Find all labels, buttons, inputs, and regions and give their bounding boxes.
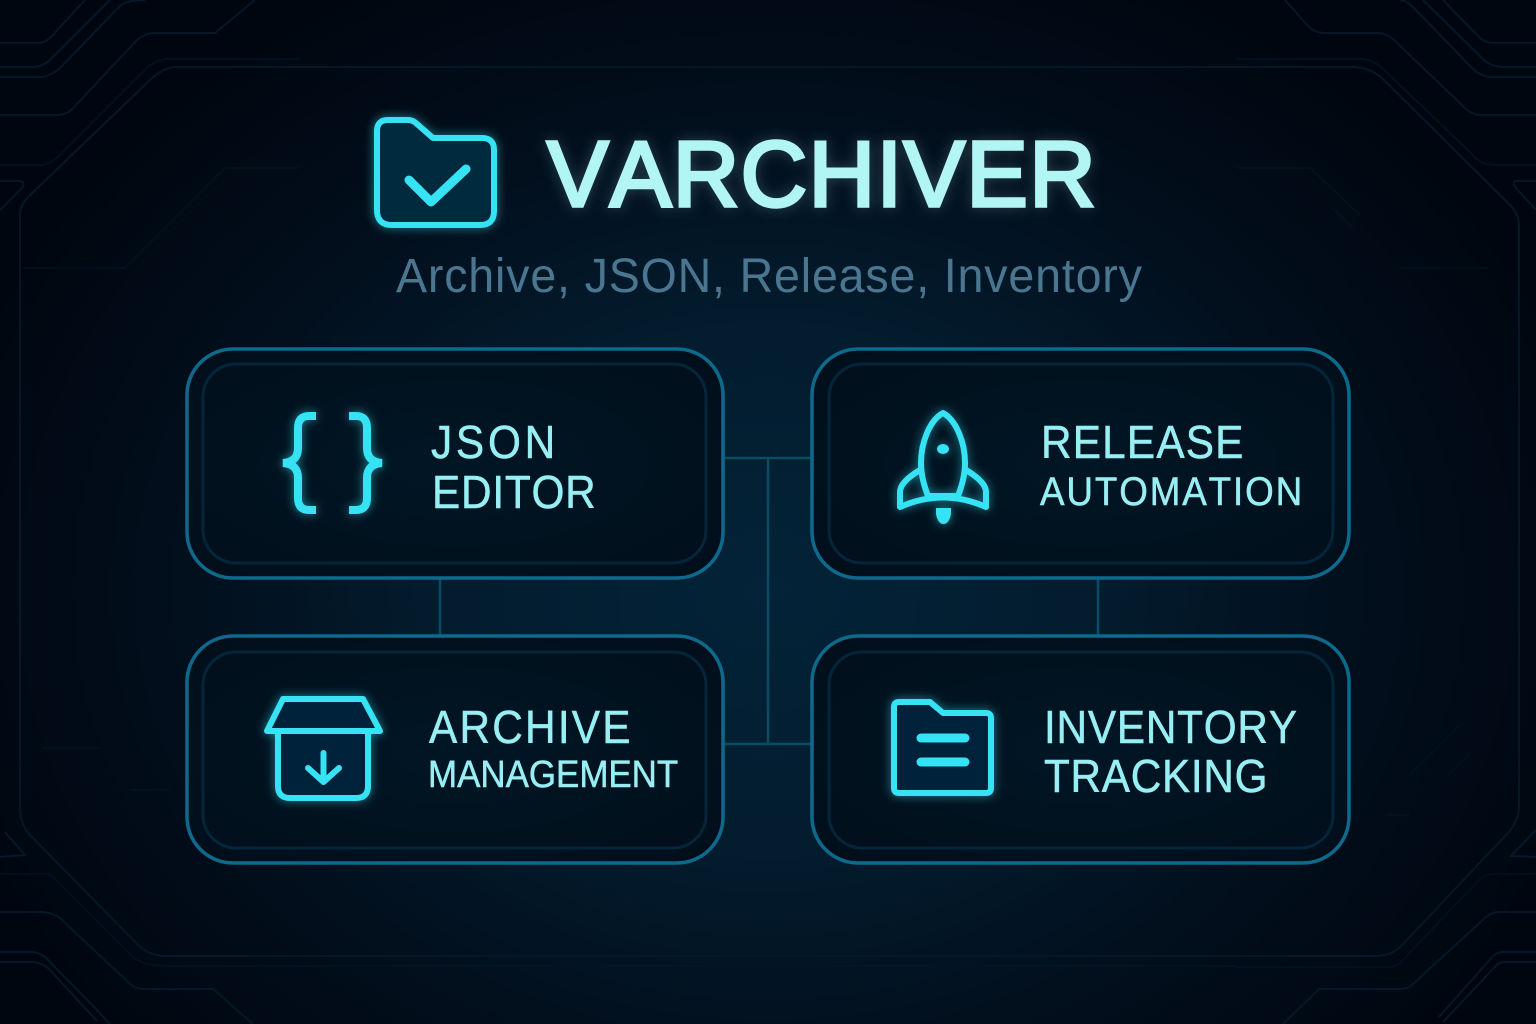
label: inventory tracking	[1044, 702, 1297, 802]
subtitle: Archive, JSON, Release, Inventory	[396, 249, 1142, 303]
panel: archive management	[187, 636, 723, 863]
connector lines	[440, 458, 1098, 744]
label: JSON editor	[431, 417, 596, 518]
label: archive management	[428, 702, 678, 795]
icon: rocket	[900, 413, 986, 524]
label: archive management: ARCHIVE	[429, 702, 630, 753]
label: JSON editor: JSON	[431, 417, 555, 468]
label: inventory tracking: TRACKING	[1044, 751, 1268, 802]
icon: curly braces	[283, 416, 382, 510]
panel: inventory tracking	[812, 636, 1349, 863]
label: inventory tracking: INVENTORY	[1044, 702, 1297, 753]
label: release automation: AUTOMATION	[1040, 470, 1302, 514]
label: release automation: RELEASE	[1041, 417, 1243, 468]
title: VARCHIVER	[547, 122, 1096, 226]
icon: inventory folder	[894, 702, 991, 793]
label: JSON editor: EDITOR	[432, 467, 596, 518]
label: release automation	[1040, 417, 1302, 514]
panel: JSON editor	[187, 349, 723, 578]
panel: release automation	[812, 349, 1349, 578]
label: archive management: MANAGEMENT	[428, 753, 678, 795]
header	[377, 120, 1142, 303]
icon: archive box	[267, 699, 380, 798]
icon: folder with check	[377, 120, 494, 225]
